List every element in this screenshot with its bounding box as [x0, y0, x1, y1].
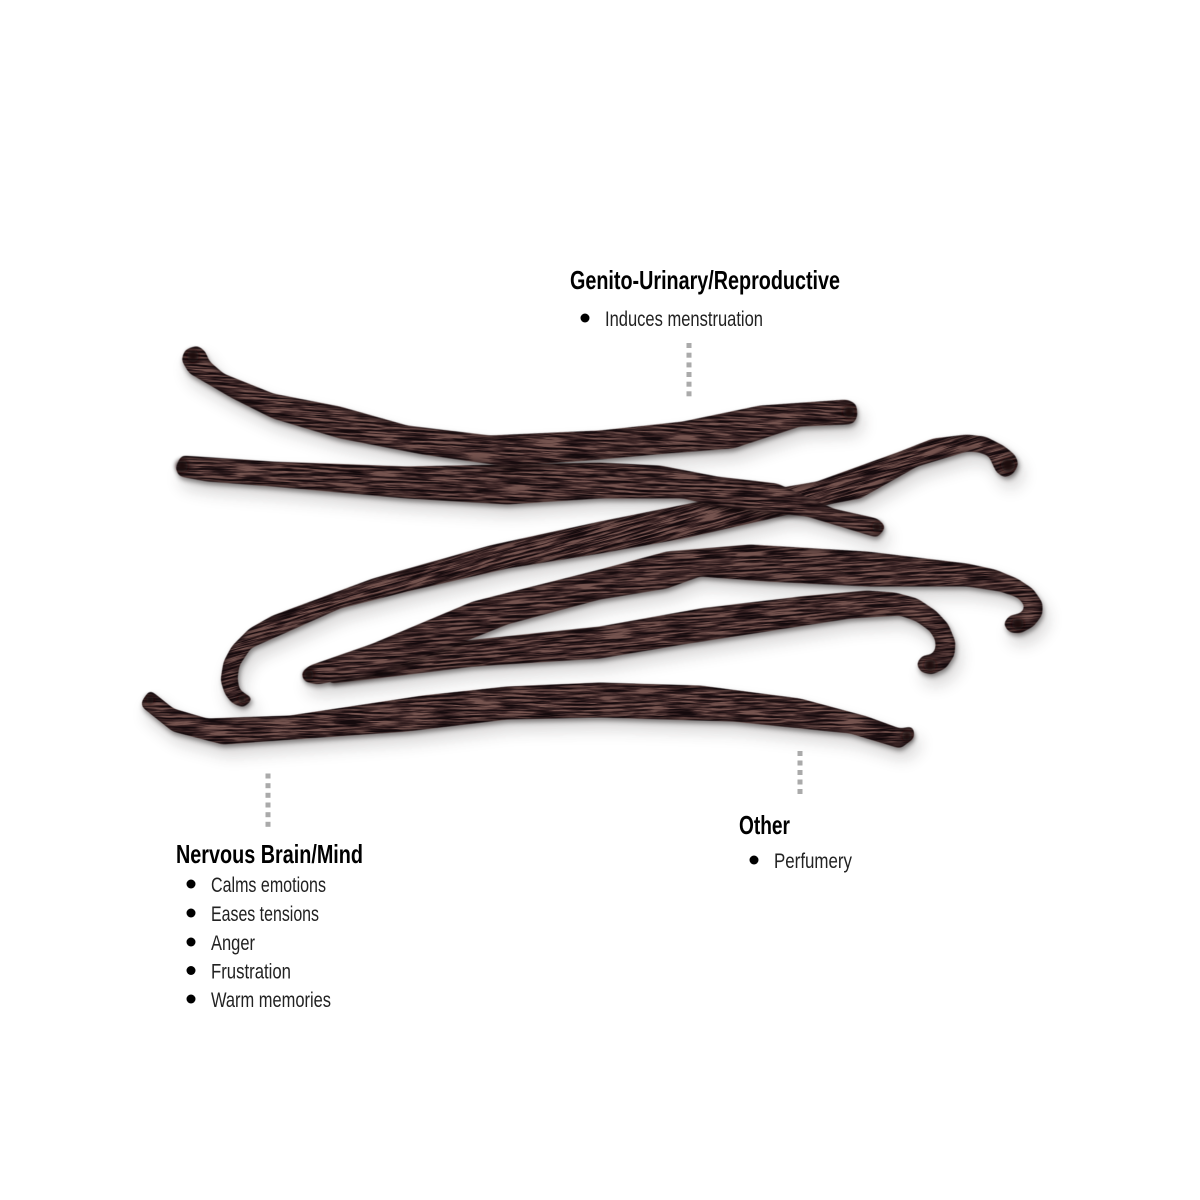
dotted connector [266, 774, 270, 827]
list item: Warm memories: Warm memories [211, 989, 331, 1012]
pod: bottom [143, 684, 913, 747]
text: Induces menstruation: Induces menstruation [605, 308, 763, 331]
callout: Genito-Urinary/Reproductive [570, 265, 840, 396]
list item: Anger [186, 932, 255, 955]
pod: top [177, 312, 862, 500]
heading: Nervous Brain/Mind: Nervous Brain/Mind [176, 839, 363, 869]
dotted connector [686, 343, 692, 396]
bullet [580, 314, 590, 322]
pod: second from top [174, 432, 887, 561]
text: Perfumery: Perfumery [774, 850, 852, 873]
vanilla pods shadow [148, 358, 1046, 758]
list item: Calms emotions [186, 874, 326, 897]
list item: Frustration: Frustration [211, 960, 291, 984]
callout: Other [739, 751, 852, 873]
vanilla pods illustration [143, 237, 1084, 905]
pod: long right hook [296, 507, 1048, 722]
list item: Warm memories [186, 989, 331, 1012]
dotted connector [798, 751, 802, 794]
list item: Frustration [186, 960, 291, 984]
pod: curved lower right hook [324, 549, 960, 725]
heading: Other: Other [739, 810, 790, 840]
list item: Anger: Anger [211, 932, 255, 955]
list item: Eases tensions [186, 903, 319, 926]
list item: Calms emotions: Calms emotions [211, 874, 326, 897]
bullet [750, 856, 758, 864]
list item: Eases tensions: Eases tensions [211, 903, 319, 926]
callout: Nervous Brain/Mind [176, 774, 363, 1012]
heading: Genito-Urinary/Reproductive: Genito-Urinary/Reproductive [570, 265, 840, 295]
pod tips: darker ends [146, 350, 1024, 741]
pod: diagonal with hooks at both ends [154, 237, 1084, 905]
